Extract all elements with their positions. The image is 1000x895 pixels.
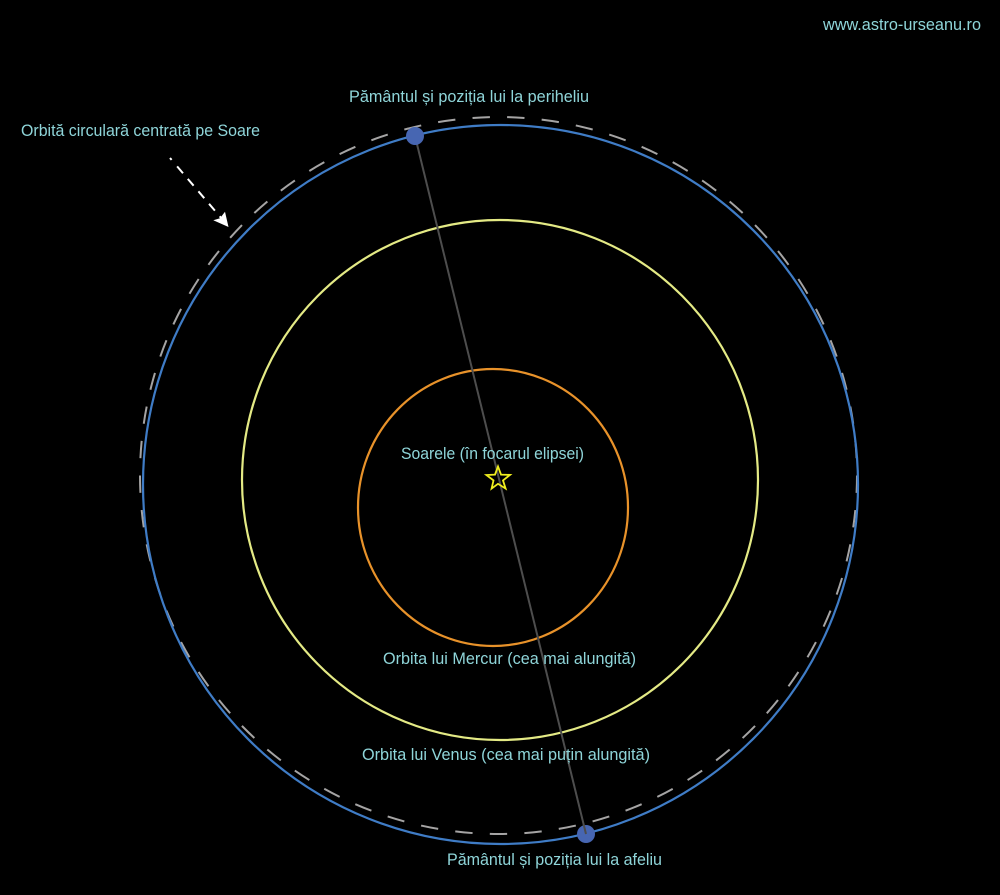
Mercury orbit <box>358 369 628 646</box>
label: circular orbit: Orbită circulară centrată pe Soare <box>21 122 260 140</box>
label: perihelion: Pământul și poziția lui la periheliu <box>349 88 589 106</box>
Earth orbit <box>143 125 858 844</box>
Earth at aphelion <box>577 825 595 843</box>
label: aphelion: Pământul și poziția lui la afeliu <box>447 851 662 869</box>
Earth at perihelion <box>406 127 424 145</box>
icon: Sun star <box>486 466 510 489</box>
label: Sun: Soarele (în focarul elipsei) <box>401 445 584 463</box>
label: Mercury orbit: Orbita lui Mercur (cea mai alungită) <box>383 650 636 668</box>
label: Venus orbit: Orbita lui Venus (cea mai puțin alungită) <box>362 746 650 764</box>
website label: www.astro-urseanu.ro <box>822 16 981 34</box>
circular orbit centred on the Sun (dashed) <box>140 117 857 834</box>
Venus orbit <box>242 220 758 740</box>
apsidal line <box>415 136 586 834</box>
arrow pointing to the circular orbit <box>170 158 228 227</box>
